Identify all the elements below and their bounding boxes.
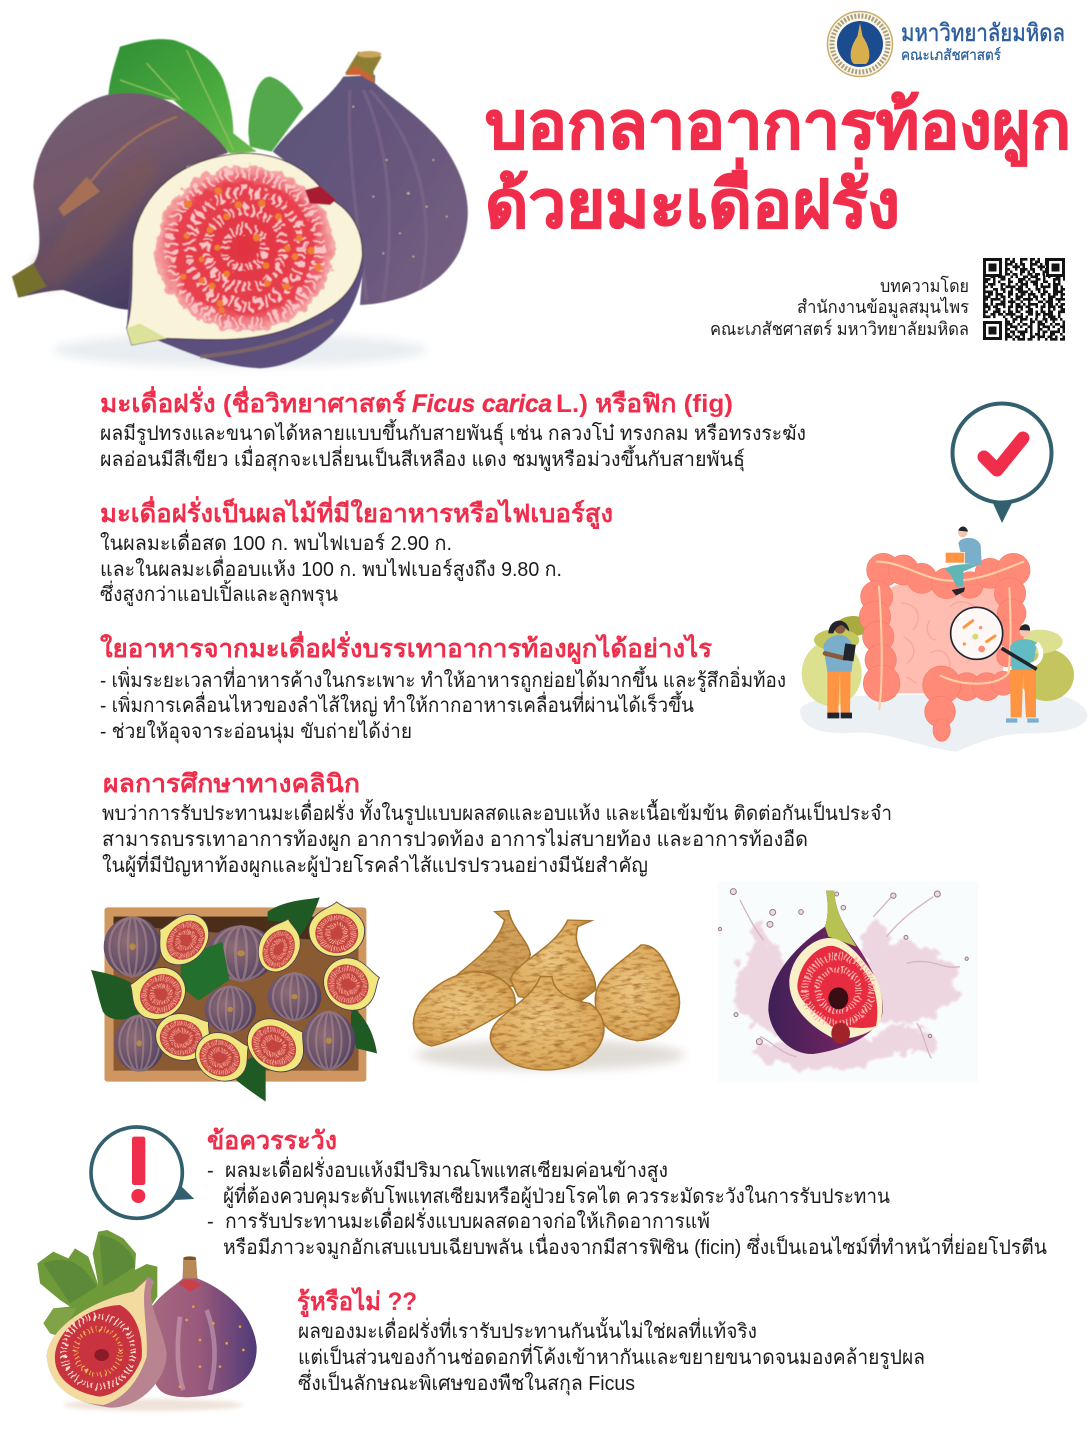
section: clinical studies: สามารถบรรเทาอาการท้องผูก อาการปวดท้อง อาการไม่สบายท้อง และอาการท้องอืด	[102, 828, 808, 852]
section: fiber content: และในผลมะเดื่ออบแห้ง 100 ก. พบไฟเบอร์สูงถึง 9.80 ก.	[100, 555, 562, 582]
section: precautions: การรับประทานมะเดื่อฝรั่งแบบผลสดอาจก่อให้เกิดอาการแพ้	[225, 1207, 710, 1233]
section: precautions: -	[207, 1160, 214, 1182]
icon: check mark speech bubble	[952, 404, 1052, 523]
section: precautions	[207, 1127, 1047, 1260]
author credit: สำนักงานข้อมูลสมุนไพร	[797, 296, 969, 318]
section: fiber content: มะเดื่อฝรั่งเป็นผลไม้ที่มีใยอาหารหรือไฟเบอร์สูง	[100, 496, 613, 530]
section: precautions: ผู้ที่ต้องควบคุมระดับโพแทสเซียมหรือผู้ป่วยโรคไต ควรระมัดระวังในการรับประทาน	[223, 1182, 890, 1209]
icon: warning speech bubble	[91, 1127, 194, 1218]
section: about figs: Ficus carica	[412, 390, 552, 418]
section: how fiber relieves constipation: - ช่วยให้อุจจาระอ่อนนุ่ม ขับถ่ายได้ง่าย	[100, 720, 412, 744]
hero image: three figs with leaves	[12, 39, 468, 368]
image: watercolor figs with leaf	[37, 1230, 257, 1411]
section: precautions: ข้อควรระวัง	[207, 1127, 337, 1155]
section: precautions: ผลมะเดื่อฝรั่งอบแห้งมีปริมาณโพแทสเซียมค่อนข้างสูง	[225, 1156, 668, 1183]
image: dried figs	[413, 911, 684, 1070]
section: clinical studies: ผลการศึกษาทางคลินิก	[103, 770, 360, 798]
section: clinical studies: พบว่าการรับประทานมะเดื่อฝรั่ง ทั้งในรูปแบบผลสดและอบแห้ง และเนื้อเข้มข้น ติดต่อกันเป็นประจำ	[102, 799, 892, 826]
section: about figs: ผลมีรูปทรงและขนาดได้หลายแบบขึ้นกับสายพันธุ์ เช่น กลวงโบ๋ ทรงกลม หรือทรงระฆัง	[100, 419, 806, 446]
section: did you know: แต่เป็นส่วนของก้านช่อดอกที่โค้งเข้าหากันและขยายขนาดจนมองคล้ายรูปผล	[298, 1343, 925, 1370]
section: how fiber relieves constipation: - เพิ่มระยะเวลาที่อาหารค้างในกระเพาะ ทำให้อาหารถูกย่อยได้มากขึ้น และรู้สึกอิ่มท้อง	[100, 666, 786, 693]
QR code	[983, 259, 1065, 339]
section: how fiber relieves constipation: - เพิ่มการเคลื่อนไหวของลำไส้ใหญ่ ทำให้กากอาหารเคลื่อนที่ผ่านได้เร็วขึ้น	[100, 691, 694, 717]
section: precautions: หรือมีภาวะจมูกอักเสบแบบเฉียบพลัน เนื่องจากมีสารฟิซิน (ficin) ซึ่งเป็นเอนไซม์ที่ทำหน้าที่ย่อยโปรตีน	[223, 1233, 1047, 1260]
section: did you know: ซึ่งเป็นลักษณะพิเศษของพืชในสกุล Ficus	[298, 1369, 635, 1396]
section: about figs: L.) หรือฟิก (fig)	[556, 390, 733, 418]
section: fiber content: ในผลมะเดื่อสด 100 ก. พบไฟเบอร์ 2.90 ก.	[100, 529, 452, 555]
university logo	[828, 12, 1065, 76]
author credit	[710, 275, 969, 339]
section: precautions: -	[207, 1211, 214, 1233]
image: fig with juice splash	[717, 882, 978, 1083]
author credit: คณะเภสัชศาสตร์ มหาวิทยาลัยมหิดล	[710, 319, 969, 339]
main title	[485, 88, 1071, 241]
illustration: large intestine with medical staff	[800, 527, 1087, 752]
section: about figs: ผลอ่อนมีสีเขียว เมื่อสุกจะเปลี่ยนเป็นสีเหลือง แดง ชมพูหรือม่วงขึ้นกับสายพันธุ์	[100, 445, 745, 472]
university logo: คณะเภสัชศาสตร์	[901, 47, 1001, 64]
section: did you know: รู้หรือไม่ ??	[297, 1286, 417, 1318]
main title: บอกลาอาการท้องผูก	[485, 88, 1071, 167]
section: did you know: ผลของมะเดื่อฝรั่งที่เรารับประทานกันนั้นไม่ใช่ผลที่แท้จริง	[298, 1317, 757, 1343]
main title: ด้วยมะเดื่อฝรั่ง	[485, 157, 900, 241]
section: about figs: มะเดื่อฝรั่ง (ชื่อวิทยาศาสตร์	[100, 386, 407, 418]
section: fiber content: ซึ่งสูงกว่าแอปเปิ้ลและลูกพรุน	[100, 580, 338, 607]
section: about figs	[100, 386, 806, 472]
section: did you know	[297, 1286, 925, 1396]
section: clinical studies	[102, 770, 892, 878]
section: how fiber relieves constipation: ใยอาหารจากมะเดื่อฝรั่งบรรเทาอาการท้องผูกได้อย่างไร	[100, 631, 713, 665]
section: how fiber relieves constipation	[100, 631, 786, 744]
university logo: มหาวิทยาลัยมหิดล	[901, 20, 1065, 47]
image: tray of fresh figs	[91, 897, 388, 1102]
author credit: บทความโดย	[880, 275, 969, 296]
section: fiber content	[100, 496, 613, 607]
section: clinical studies: ในผู้ที่มีปัญหาท้องผูกและผู้ป่วยโรคลำไส้แปรปรวนอย่างมีนัยสำคัญ	[102, 851, 648, 878]
